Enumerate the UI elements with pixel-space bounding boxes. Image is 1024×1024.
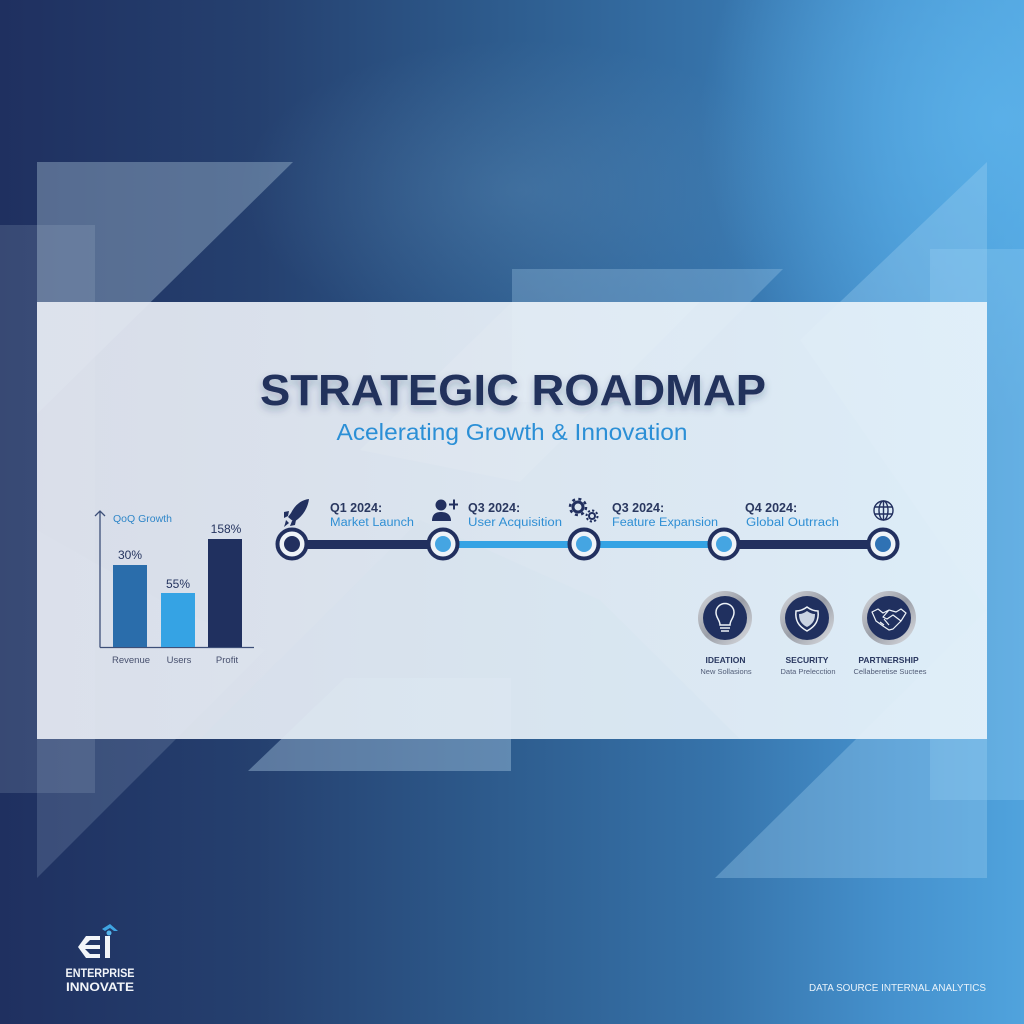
label: Q4 2024 [745, 501, 839, 529]
icon: EI mark [78, 924, 118, 958]
bar: revenue [112, 548, 150, 666]
badge: partnership: PARTNERSHIP [858, 655, 919, 665]
bar: users: Users [167, 655, 192, 666]
bar: profit: Profit [216, 655, 238, 666]
badge: partnership: Cellaberetise Suctees [854, 667, 927, 676]
bar chart: QoQ growth [95, 511, 254, 666]
label: Q3 2024 user acquisition: User Acquisition [468, 517, 562, 529]
badge: security: SECURITY [786, 655, 829, 665]
node: Q2 [428, 530, 458, 558]
bar: users: 55% [166, 577, 190, 591]
bar: users [161, 577, 195, 666]
label: Q3 2024 feature expansion: Feature Expansion [612, 517, 718, 529]
node: Q1 [278, 530, 306, 558]
label: Q1 2024: Q1 2024: [330, 501, 382, 515]
chart axes [95, 511, 254, 648]
icon: light bulb [698, 591, 752, 645]
label: Q4 2024: Q4 2024: [745, 501, 797, 515]
badge: partnership [854, 591, 927, 676]
label: Q3 2024 user acquisition: Q3 2024: [468, 501, 520, 515]
bar: revenue: Revenue [112, 655, 150, 666]
panel: main content [37, 302, 987, 739]
icon: add user [432, 500, 458, 521]
badge: ideation: IDEATION [706, 655, 745, 665]
icon: gears [570, 499, 598, 522]
node: Q3 [570, 530, 598, 558]
decorative translucent shapes [0, 162, 1024, 878]
bar: profit [208, 522, 242, 666]
label: Q4 2024: Global Outrrach [746, 517, 839, 529]
chart title: QoQ Growth [113, 513, 172, 525]
logo: Enterprise Innovate [66, 924, 134, 994]
timeline [278, 499, 898, 558]
timeline connectors [300, 540, 872, 549]
icon: handshake [862, 591, 916, 645]
label: Q3 2024 user acquisition [468, 501, 562, 529]
icon: shield [780, 591, 834, 645]
subtitle: Acelerating Growth & Innovation [336, 419, 688, 445]
label: Q3 2024 feature expansion: Q3 2024: [612, 501, 664, 515]
bar: profit: 158% [211, 522, 242, 536]
label: Q1 2024 [330, 501, 414, 529]
data source note: DATA SOURCE INTERNAL ANALYTICS [809, 983, 986, 994]
label: Q1 2024: Market Launch [330, 517, 414, 529]
icon: globe [874, 501, 893, 520]
logo: Enterprise Innovate: INNOVATE [66, 980, 134, 994]
label: Q3 2024 feature expansion [612, 501, 718, 529]
badge: security: Data Prelecction [780, 667, 836, 676]
title: STRATEGIC ROADMAP [260, 366, 766, 415]
badge: ideation: New Sollasions [700, 667, 752, 676]
badge: security [780, 591, 836, 676]
icon: rocket [284, 499, 309, 527]
node: Q4 [710, 530, 738, 558]
logo: Enterprise Innovate: ENTERPRISE [66, 966, 134, 980]
bar: revenue: 30% [118, 548, 142, 562]
badge: ideation [698, 591, 752, 676]
node: end [868, 530, 898, 558]
